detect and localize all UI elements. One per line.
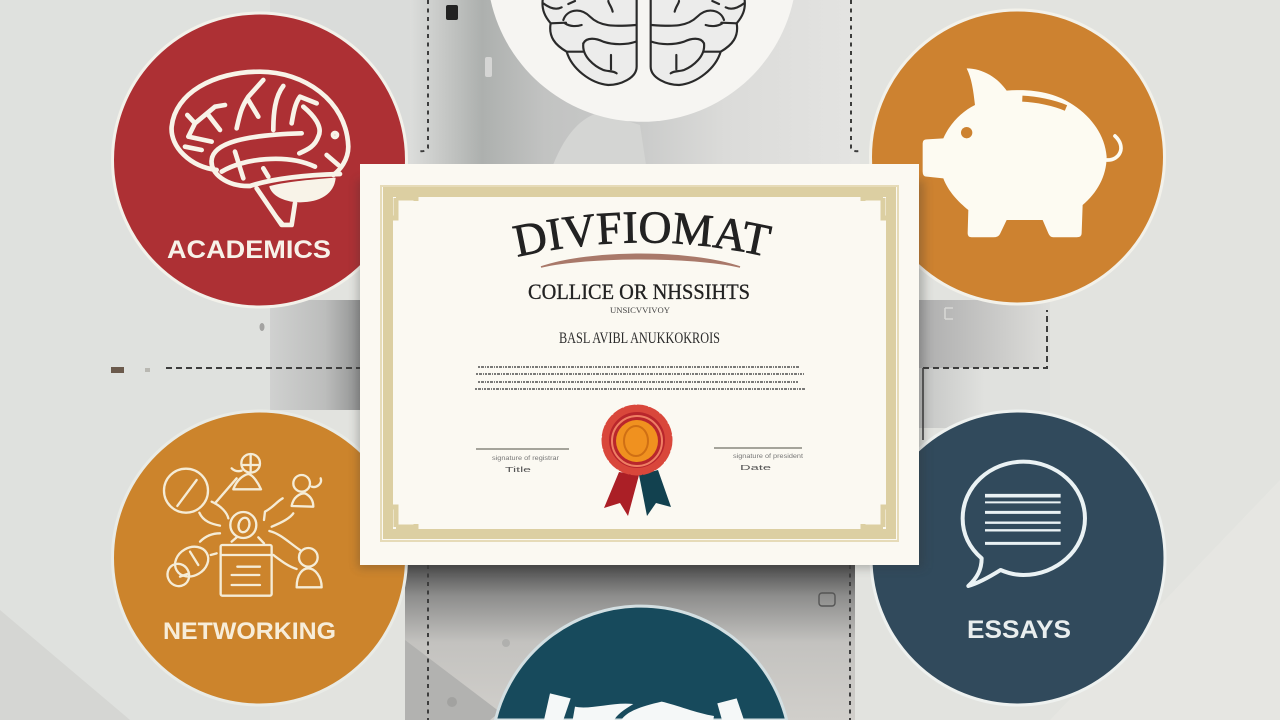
panel: academics [112,13,406,307]
top circle [491,0,793,122]
small subtitle: UNSICVVIVOY [610,305,670,315]
icon: speech bubble [963,462,1085,586]
right signature [714,448,803,472]
label: networking: NETWORKING [163,618,336,645]
panel: essays [871,411,1165,705]
panel: networking [112,411,406,705]
networking circle [112,411,406,705]
diploma title: DIVFIOMAT [512,212,772,257]
gold frame [381,186,898,541]
card shadow [358,180,924,568]
academics circle [112,13,406,307]
icon: network [163,454,322,596]
right signature: Date [740,465,771,472]
icon: handshake [544,693,744,720]
recipient line: BASL AVIBL ANUKKOKROIS [559,330,720,347]
icon: line brain right half [651,0,745,85]
icon: line brain [542,0,637,85]
savings circle [870,10,1164,304]
dashed connector: bottom left [427,565,429,720]
icon: brain [172,72,348,225]
left signature: Title [505,467,531,474]
dashed connector: top left [418,0,428,151]
panel: savings [870,10,1164,304]
connector stub: right vertical [922,368,924,440]
diploma card [360,164,919,565]
diploma title [512,212,772,257]
body text lines [475,367,805,389]
panel: top brain circle [491,0,793,122]
bottom circle [495,606,787,720]
dashed connector: top right [851,0,860,151]
title swash [541,254,740,267]
dashed connector: bottom right [849,565,851,720]
dashed connector: left horizontal [166,367,360,369]
seal with ribbons [604,407,671,516]
left signature: signature of registrar [492,456,559,462]
small marks [111,5,953,707]
essays circle [871,411,1165,705]
left signature [476,449,569,474]
panel: diploma [352,164,930,574]
panel: bottom handshake circle [495,606,787,720]
icon: piggy bank [923,68,1121,237]
college line: COLLICE OR NHSSIHTS [528,279,750,304]
dashed connector: right [923,310,1047,368]
label: academics: ACADEMICS [167,236,331,264]
right signature: signature of president [733,454,803,460]
label: essays: ESSAYS [967,616,1071,644]
